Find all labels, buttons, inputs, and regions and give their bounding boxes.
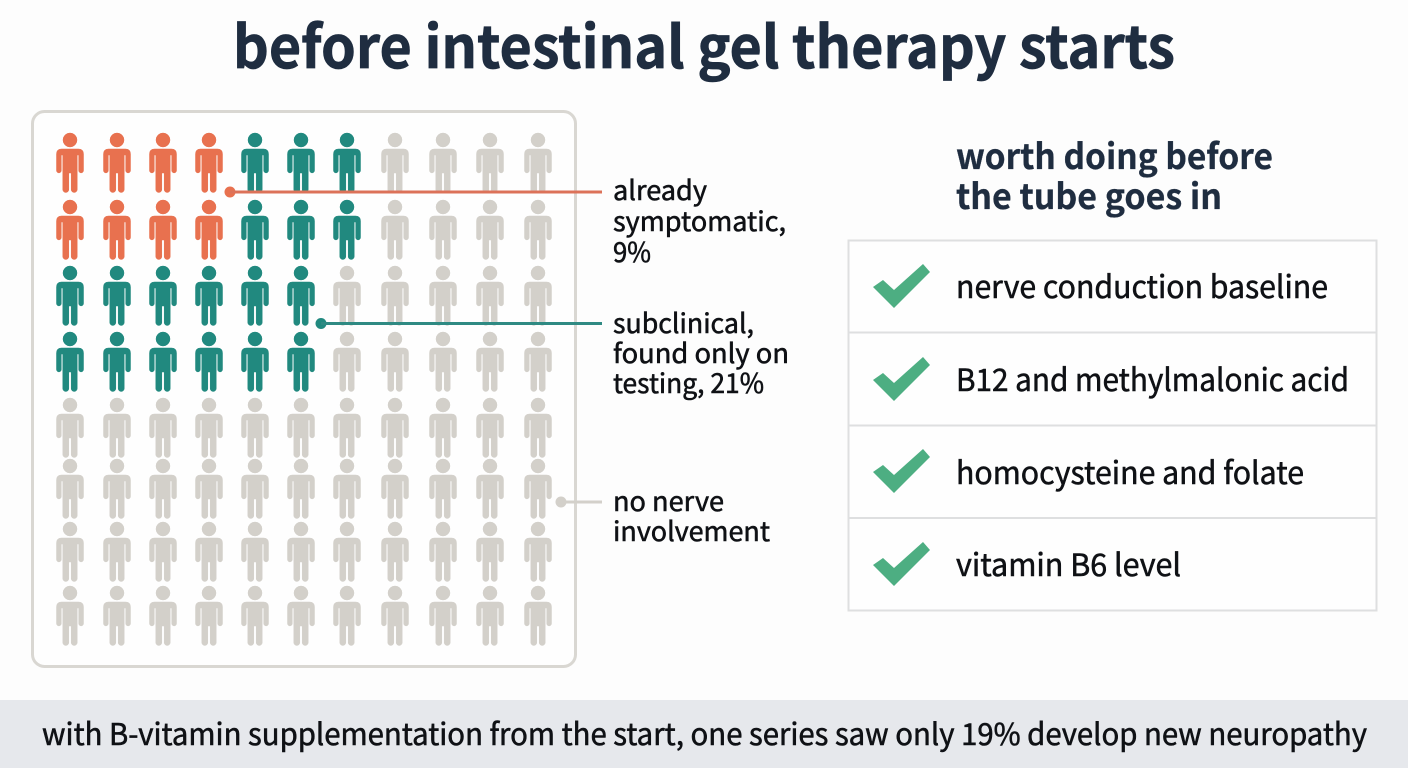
leader line: already symptomatic (224, 186, 602, 198)
icon: check (873, 264, 930, 308)
row 4 of people (56, 332, 552, 392)
item: B12 and methylmalonic acid: B12 and methylmalonic acid (956, 355, 1349, 400)
item: homocysteine and folate: homocysteine and folate (956, 448, 1304, 493)
label: subclinical 21% (613, 302, 789, 401)
item: vitamin B6 level: vitamin B6 level (956, 540, 1181, 585)
panel: pictogram of patients (32, 112, 576, 666)
row 6 of people (56, 459, 552, 518)
label: subclinical 21%: testing, 21% (613, 362, 764, 401)
footer callout bar (0, 700, 1408, 768)
icon: check (873, 449, 930, 493)
row 2 of people (56, 200, 552, 260)
icon: check (873, 542, 930, 586)
row 5 of people (56, 398, 552, 458)
label: already symptomatic 9%: 9% (613, 231, 651, 270)
label: already symptomatic 9%: symptomatic, (613, 200, 786, 239)
leader line: no nerve involvement (556, 496, 602, 508)
checklist heading: the tube goes in (956, 169, 1222, 220)
icon: check (873, 357, 930, 401)
label: no nerve involvement (613, 480, 770, 549)
footer callout bar: with B-vitamin supplementation from the start, one series saw only 19% develop new neuropathy (42, 710, 1367, 754)
checklist table (848, 240, 1376, 610)
checklist heading: worth doing before (956, 129, 1273, 180)
row 8 of people (56, 586, 552, 646)
label: no nerve involvement: involvement (613, 510, 770, 549)
label: subclinical 21%: found only on (613, 332, 789, 371)
title: before intestinal gel therapy starts (233, 1, 1175, 85)
row 7 of people (56, 522, 552, 582)
label: no nerve involvement: no nerve (613, 480, 724, 519)
label: already symptomatic 9%: already (613, 169, 707, 208)
checklist heading (956, 129, 1273, 220)
row 3 of people (56, 266, 552, 326)
leader line: subclinical (316, 318, 602, 329)
item: nerve conduction baseline: nerve conduction baseline (956, 262, 1328, 307)
label: subclinical 21%: subclinical, (613, 302, 754, 341)
row 1 of people (56, 133, 552, 192)
label: already symptomatic 9% (613, 169, 786, 270)
